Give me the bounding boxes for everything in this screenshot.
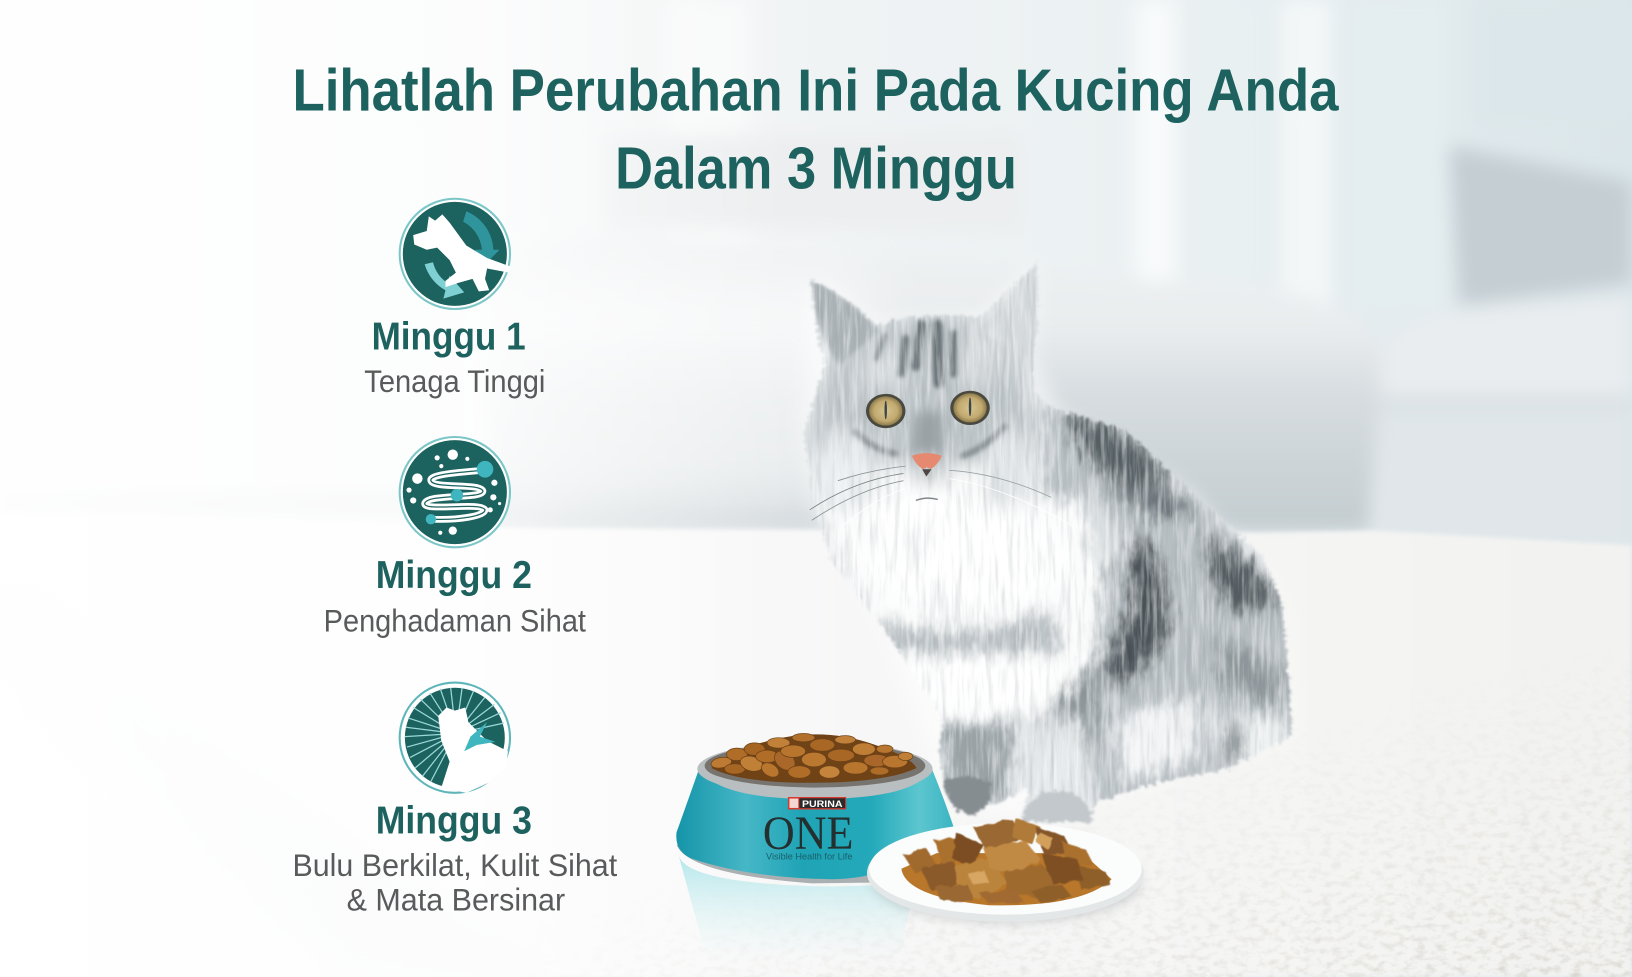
cat: body patches — [942, 406, 1301, 812]
meat chunks — [903, 818, 1110, 903]
cat: ears — [811, 262, 1039, 366]
cat: paws — [943, 777, 1093, 822]
week 2 heading: Minggu 2 — [376, 554, 532, 597]
bowl base ring — [677, 845, 895, 883]
week 1 description: Tenaga Tinggi — [364, 364, 545, 399]
front rim edge — [699, 768, 932, 799]
title — [292, 56, 1339, 201]
logo: Purina — [788, 797, 846, 809]
cat: head fur — [812, 315, 1032, 535]
gravy — [901, 853, 1112, 905]
plate shadow — [874, 843, 1141, 922]
week 3 heading: Minggu 3 — [376, 799, 532, 842]
cat: soft halo — [804, 262, 1293, 820]
plate — [867, 824, 1144, 922]
cat: chest — [822, 496, 1103, 718]
food bowl — [676, 734, 955, 883]
kibble pile — [710, 734, 916, 782]
week 3 description: Bulu Berkilat, Kulit Sihat — [292, 848, 618, 883]
logo: ONE: ONE — [763, 807, 853, 860]
cat — [791, 250, 1311, 832]
week 3 description — [292, 848, 618, 917]
week 1 heading: Minggu 1 — [372, 316, 526, 359]
title: Lihatlah Perubahan Ini Pada Kucing Anda — [292, 56, 1339, 123]
bowl body — [676, 768, 955, 879]
week 1 item — [364, 199, 545, 399]
cat: forehead stripes — [856, 325, 1004, 456]
icon: digestion — [400, 437, 510, 547]
title: Dalam 3 Minggu — [615, 134, 1017, 201]
week 2 description: Penghadaman Sihat — [324, 604, 586, 639]
logo: Purina: PURINA — [802, 799, 843, 809]
week 3 item — [292, 683, 618, 917]
cat: nose bridge — [912, 411, 943, 453]
bowl rim — [697, 742, 933, 796]
plate of wet food — [867, 818, 1144, 922]
week 3 description: & Mata Bersinar — [347, 882, 565, 917]
cat: masked fur — [804, 264, 1294, 818]
cat: eyes — [866, 391, 990, 428]
icon: energetic cat — [400, 199, 510, 309]
logo: tagline: Visible Health for Life — [766, 851, 853, 861]
cat: whiskers — [810, 466, 1072, 525]
week 2 item — [324, 437, 586, 639]
icon: shiny cat — [400, 683, 510, 793]
cat: nose and mouth — [912, 453, 942, 500]
cat: fur streak texture — [810, 274, 1280, 806]
bowl reflection — [679, 855, 916, 962]
